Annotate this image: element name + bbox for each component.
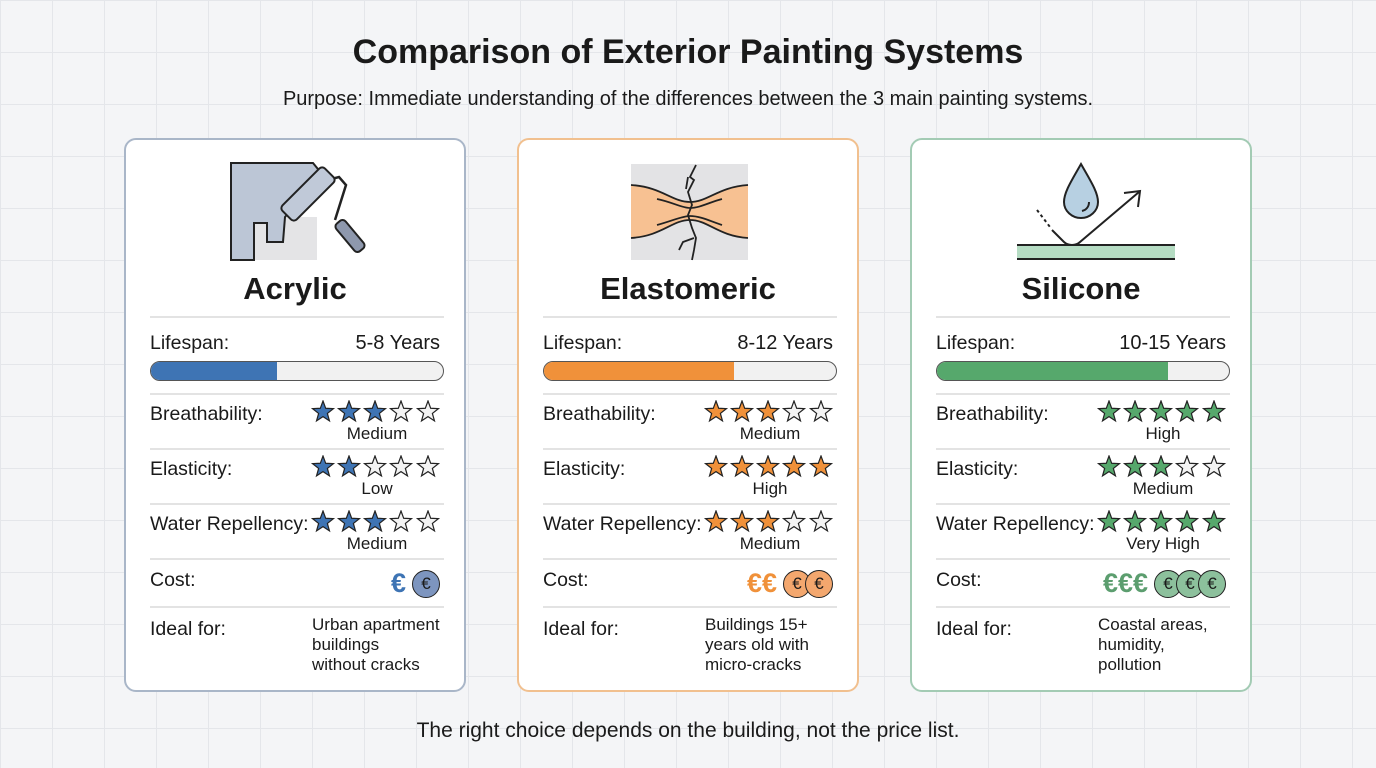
row: cost: Cost:	[543, 569, 589, 591]
panel: silicone: High	[1146, 424, 1180, 443]
panel: silicone: Coastal areas,	[1098, 615, 1208, 634]
panel: silicone: €	[1163, 574, 1173, 592]
row: elasticity: Elasticity:	[936, 458, 1018, 480]
row: water repellency: Water Repellency:	[543, 513, 702, 535]
bar: lifespan	[936, 361, 1230, 381]
heading: Silicone	[1022, 271, 1140, 306]
panel: acrylic: Urban apartment	[312, 615, 440, 634]
panel: acrylic: buildings	[312, 635, 379, 654]
icon: water drop repelled	[1017, 162, 1175, 260]
subtitle: Purpose: Immediate understanding of the differences between the 3 main painting systems.	[283, 88, 1093, 110]
panel: silicone: pollution	[1098, 655, 1161, 674]
row: elasticity: Elasticity:	[543, 458, 625, 480]
row: breathability: Breathability:	[150, 403, 263, 425]
panel: elastomeric: High	[753, 479, 787, 498]
footer note: The right choice depends on the building, not the price list.	[417, 719, 959, 742]
panel: elastomeric: micro-cracks	[705, 655, 801, 674]
row: cost: Cost:	[150, 569, 196, 591]
row: breathability: Breathability:	[936, 403, 1049, 425]
panel: elastomeric: €	[814, 574, 824, 592]
panel: elastomeric	[517, 138, 859, 692]
heading: Elastomeric	[600, 271, 776, 306]
panel: elastomeric: €	[792, 574, 802, 592]
panel: silicone: €	[1207, 574, 1217, 592]
row: water repellency: Water Repellency:	[936, 513, 1095, 535]
panel: elastomeric: Medium	[740, 534, 800, 553]
panel: acrylic: Medium	[347, 534, 407, 553]
panel: silicone: €€€	[1103, 568, 1148, 598]
row: ideal for: Ideal for:	[150, 618, 226, 640]
panel: acrylic: Medium	[347, 424, 407, 443]
panel: elastomeric: €€	[747, 568, 777, 598]
panel: elastomeric: 8-12 Years	[737, 332, 833, 354]
panel: elastomeric: Medium	[740, 424, 800, 443]
panel: acrylic: without cracks	[312, 655, 420, 674]
panel: silicone	[910, 138, 1252, 692]
bar: lifespan	[543, 361, 837, 381]
heading: Acrylic	[243, 271, 347, 306]
row: elasticity: Elasticity:	[150, 458, 232, 480]
row: ideal for: Ideal for:	[936, 618, 1012, 640]
panel: acrylic	[124, 138, 466, 692]
row: lifespan: Lifespan:	[150, 332, 229, 354]
panel: silicone: Very High	[1126, 534, 1200, 553]
row: lifespan: Lifespan:	[936, 332, 1015, 354]
panel: silicone: €	[1185, 574, 1195, 592]
title: Comparison of Exterior Painting Systems	[353, 33, 1023, 71]
panel: acrylic: €	[421, 574, 431, 592]
row: ideal for: Ideal for:	[543, 618, 619, 640]
row: lifespan: Lifespan:	[543, 332, 622, 354]
row: breathability: Breathability:	[543, 403, 656, 425]
panel: elastomeric: Buildings 15+	[705, 615, 808, 634]
icon: crack bridging	[630, 164, 748, 260]
panel: acrylic: €	[391, 568, 406, 598]
panel: silicone: 10-15 Years	[1119, 332, 1226, 354]
bar: lifespan	[150, 361, 444, 381]
panel: elastomeric: years old with	[705, 635, 809, 654]
panel: silicone: humidity,	[1098, 635, 1165, 654]
icon: paint roller on wall	[230, 162, 366, 261]
panel: acrylic: Low	[361, 479, 393, 498]
panel: acrylic: 5-8 Years	[355, 332, 440, 354]
row: cost: Cost:	[936, 569, 982, 591]
panel: silicone: Medium	[1133, 479, 1193, 498]
row: water repellency: Water Repellency:	[150, 513, 309, 535]
